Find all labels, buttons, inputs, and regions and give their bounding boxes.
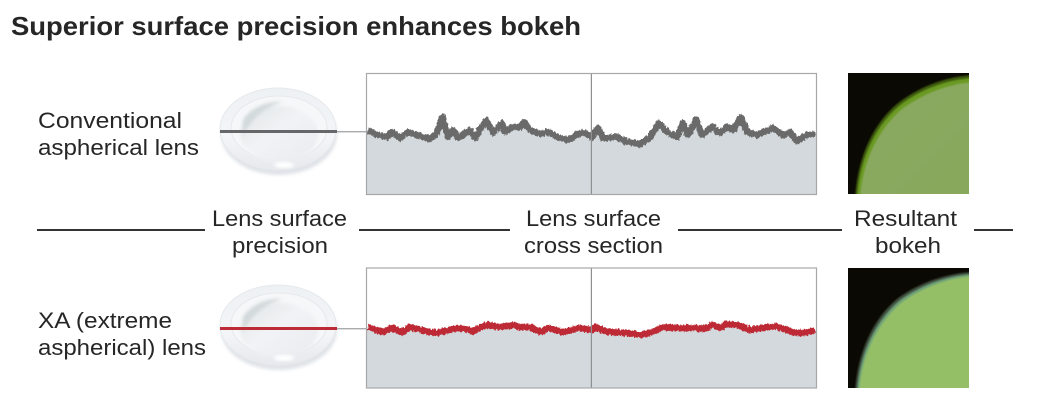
icon: XA lens with red line xyxy=(220,285,366,370)
label: XA extreme aspherical lens xyxy=(38,308,206,360)
label: conventional aspherical lens xyxy=(38,108,199,160)
column label: lens surface cross section: Lens surface xyxy=(526,206,661,231)
column label: lens surface precision xyxy=(212,206,347,258)
label: conventional aspherical lens: Conventional xyxy=(38,108,182,133)
column label: resultant bokeh: bokeh xyxy=(875,233,941,258)
chart: XA lens cross section xyxy=(366,268,816,388)
divider rule: second xyxy=(359,229,510,231)
title: Superior surface precision enhances bokeh xyxy=(11,11,581,41)
column label: resultant bokeh xyxy=(854,206,958,258)
column label: lens surface cross section: cross section xyxy=(524,233,663,258)
divider rule: right xyxy=(974,229,1013,231)
column label: lens surface precision: Lens surface xyxy=(212,206,347,231)
label: XA extreme aspherical lens: XA (extreme xyxy=(38,308,172,333)
icon: conventional lens with grey line xyxy=(220,88,366,175)
label: conventional aspherical lens: aspherical lens xyxy=(38,135,199,160)
column label: lens surface precision: precision xyxy=(232,233,328,258)
image: XA lens bokeh xyxy=(848,268,975,392)
image: conventional lens bokeh xyxy=(848,73,975,198)
divider rule: left xyxy=(37,229,205,231)
chart: conventional lens cross section xyxy=(366,74,816,194)
label: XA extreme aspherical lens: aspherical) lens xyxy=(38,335,206,360)
column label: resultant bokeh: Resultant xyxy=(854,206,958,231)
divider rule: third xyxy=(678,229,842,231)
column label: lens surface cross section xyxy=(524,206,663,258)
